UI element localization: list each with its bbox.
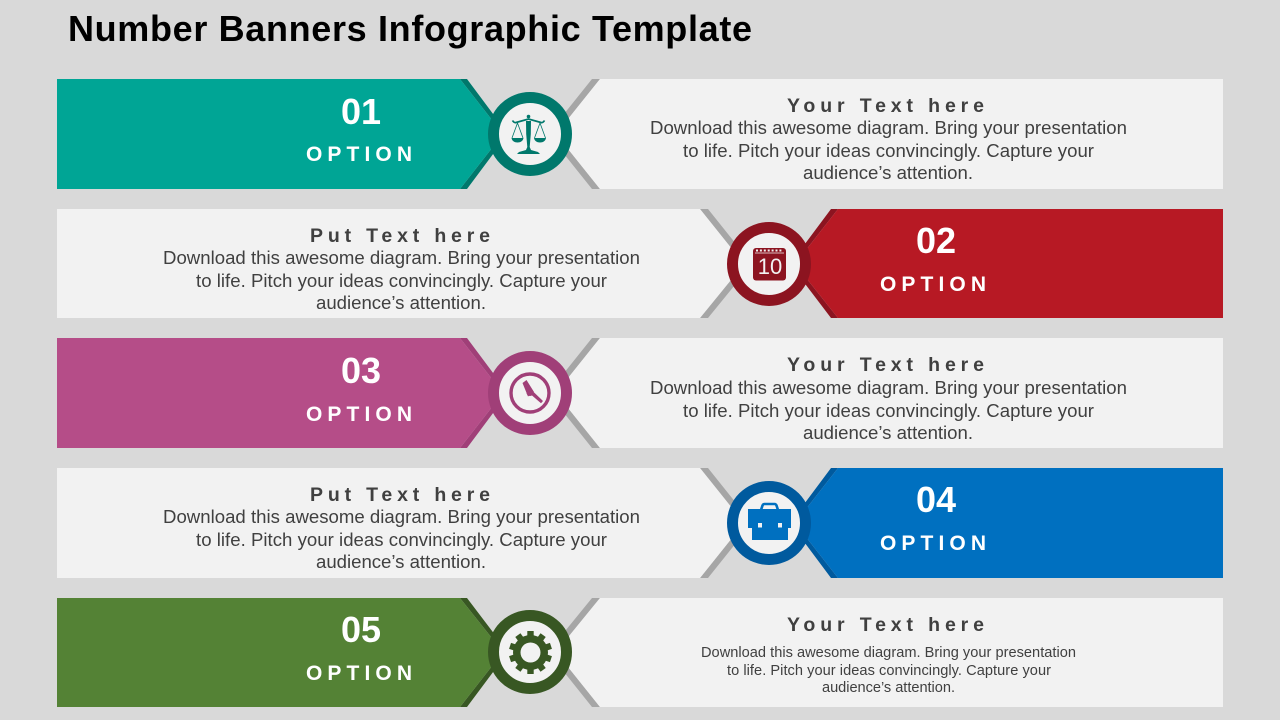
text panel: option 01 description: Your Text here — [787, 95, 984, 117]
text panel: option 04 description — [57, 468, 752, 578]
panel: option 03 row — [57, 338, 1223, 448]
text panel: option 03 description — [548, 338, 1223, 448]
banner: option 05 green: 05 — [341, 609, 381, 650]
icon: gear in circle — [494, 616, 566, 688]
text panel: option 01 description: Download this awesome diagram. Bring your presentation — [650, 117, 1127, 138]
icon: calendar in circle — [732, 228, 806, 300]
text panel: option 04 description: to life. Pitch your ideas convincingly. Capture your — [196, 529, 607, 550]
banner: option 04 blue — [790, 468, 1223, 578]
text panel: option 02 description — [57, 209, 752, 318]
text panel: option 03 description: to life. Pitch your ideas convincingly. Capture your — [683, 400, 1094, 421]
text panel: option 05 description — [548, 598, 1223, 707]
icon: briefcase in circle — [732, 486, 806, 560]
text panel: option 04 description: Put Text here — [310, 484, 490, 506]
text panel: option 05 description: Download this awesome diagram. Bring your presentation — [701, 645, 1076, 661]
text panel: option 05 description: to life. Pitch your ideas convincingly. Capture your — [727, 663, 1051, 679]
banner: option 01 teal: 01 — [341, 91, 381, 132]
text panel: option 03 description: Download this awesome diagram. Bring your presentation — [650, 377, 1127, 398]
icon: scales of justice in circle — [494, 98, 566, 170]
text panel: option 02 description: audience’s attention. — [316, 292, 486, 313]
title: Number Banners Infographic Template — [68, 8, 752, 49]
text panel: option 01 description — [548, 79, 1223, 189]
text panel: option 03 description: audience’s attention. — [803, 422, 973, 443]
icon: calendar in circle: 10 — [758, 254, 782, 279]
banner: option 02 red — [790, 209, 1223, 318]
text panel: option 01 description: to life. Pitch your ideas convincingly. Capture your — [683, 140, 1094, 161]
text panel: option 02 description: Put Text here — [310, 225, 490, 247]
banner: option 03 magenta: OPTION — [306, 403, 412, 426]
text panel: option 02 description: Download this awesome diagram. Bring your presentation — [163, 247, 640, 268]
banner: option 05 green — [57, 598, 508, 707]
panel: option 02 row — [57, 209, 1223, 318]
text panel: option 03 description: Your Text here — [787, 354, 984, 376]
banner: option 01 teal — [57, 79, 508, 189]
banner: option 01 teal: OPTION — [306, 143, 412, 166]
text panel: option 04 description: Download this awesome diagram. Bring your presentation — [163, 506, 640, 527]
text panel: option 05 description: Your Text here — [787, 614, 984, 636]
banner: option 03 magenta — [57, 338, 508, 448]
banner: option 02 red: OPTION — [880, 273, 986, 296]
panel: option 01 row — [57, 79, 1223, 189]
panel: option 05 row — [57, 598, 1223, 707]
icon: clock in circle — [494, 356, 566, 430]
text panel: option 01 description: audience’s attention. — [803, 162, 973, 183]
text panel: option 02 description: to life. Pitch your ideas convincingly. Capture your — [196, 270, 607, 291]
banner: option 03 magenta: 03 — [341, 350, 381, 391]
panel: option 04 row — [57, 468, 1223, 578]
banner: option 04 blue: 04 — [916, 479, 956, 520]
text panel: option 04 description: audience’s attention. — [316, 551, 486, 572]
text panel: option 05 description: audience’s attention. — [822, 680, 955, 696]
banner: option 05 green: OPTION — [306, 662, 412, 685]
banner: option 02 red: 02 — [916, 220, 956, 261]
banner: option 04 blue: OPTION — [880, 532, 986, 555]
